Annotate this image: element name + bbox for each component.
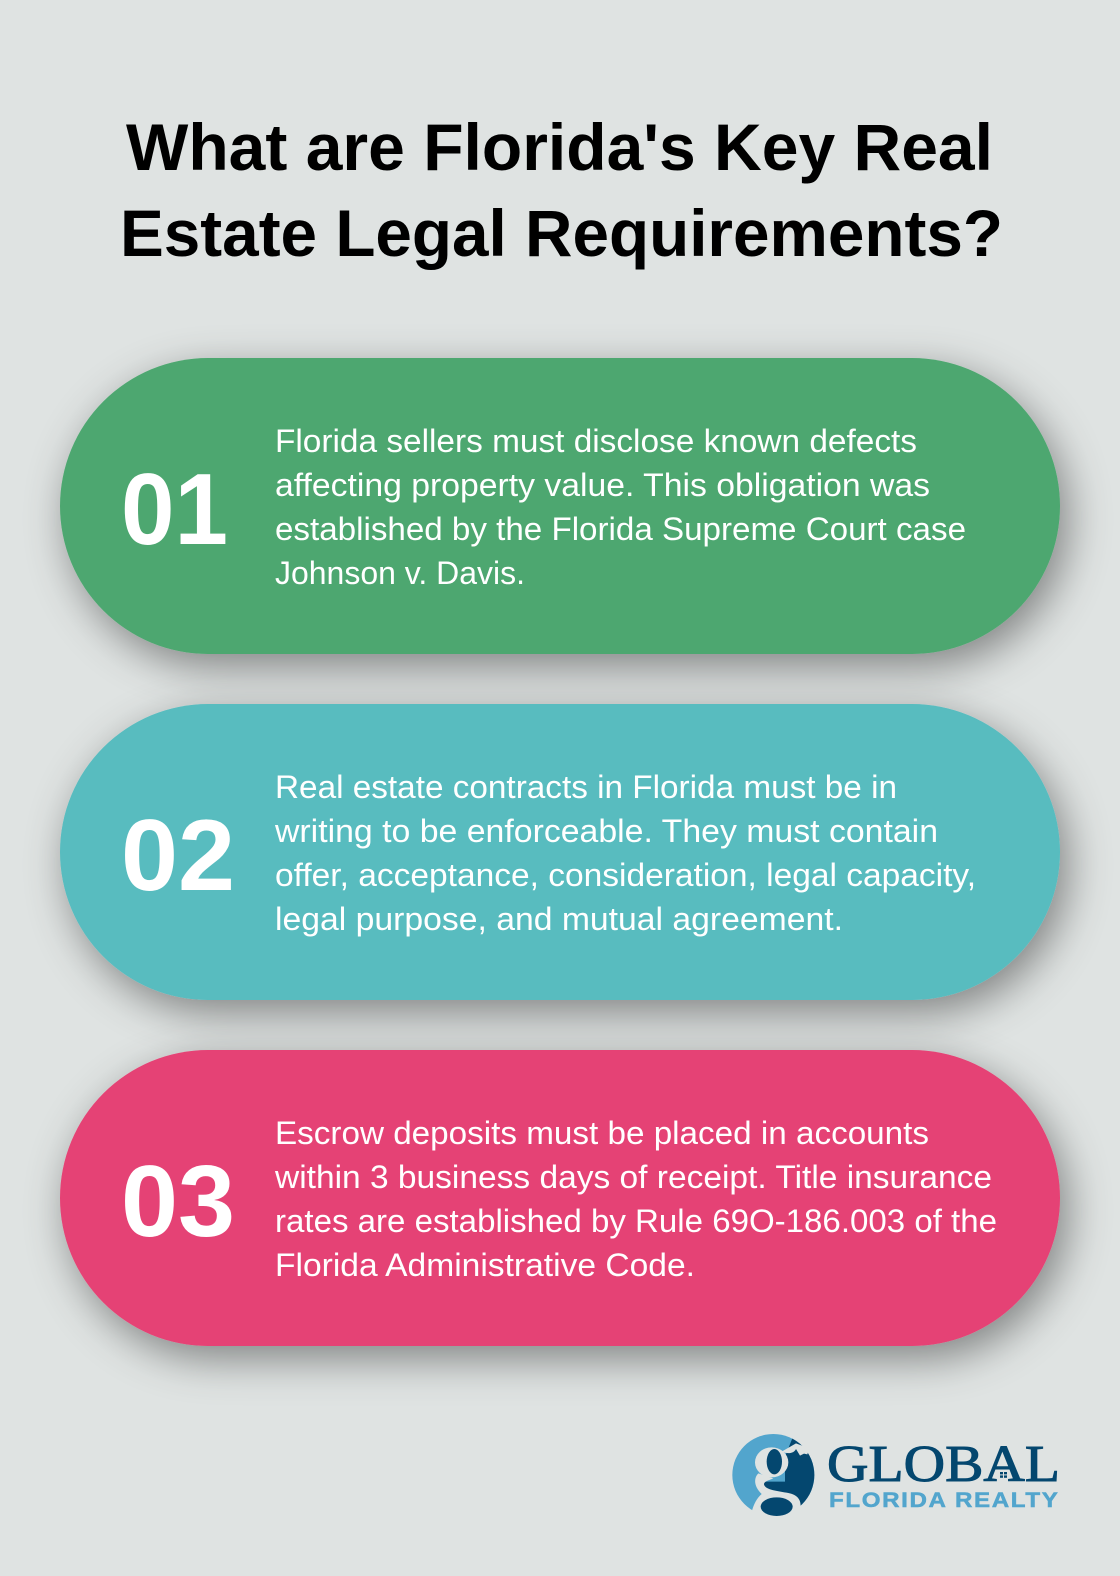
text: contracts: Real estate contracts in Florida must be in — [275, 769, 897, 805]
number 02: 02 — [121, 800, 235, 912]
text: escrow: Florida Administrative Code. — [275, 1247, 695, 1283]
text: contracts: writing to be enforceable. They must contain — [274, 813, 938, 849]
icon: g roundel — [732, 1434, 814, 1516]
teal pill — [60, 704, 1060, 1000]
number 01: 01 — [121, 454, 228, 566]
text: disclosure: Florida sellers must disclose known defects — [275, 423, 917, 459]
wordmark: Florida Realty: FLORIDA REALTY — [829, 1488, 1058, 1512]
text: escrow — [274, 1115, 997, 1283]
title — [120, 110, 1003, 270]
number 03: 03 — [121, 1146, 235, 1258]
icon: house window — [1000, 1472, 1007, 1478]
text: disclosure: Johnson v. Davis. — [275, 555, 525, 591]
logo: Global Florida Realty — [732, 1432, 1060, 1522]
text: contracts — [274, 769, 976, 937]
text: contracts: offer, acceptance, consideration, legal capacity, — [275, 857, 976, 893]
green pill — [60, 358, 1060, 654]
panel: step 02 contracts — [60, 704, 1060, 1000]
title: Estate Legal Requirements? — [120, 196, 1003, 270]
text: contracts: legal purpose, and mutual agreement. — [275, 901, 843, 937]
text: disclosure: affecting property value. This obligation was — [275, 467, 930, 503]
wordmark: GLOBAL: GLOBAL — [827, 1436, 1060, 1493]
panel: step 01 disclosure — [60, 358, 1060, 654]
text: escrow: Escrow deposits must be placed in accounts — [275, 1115, 929, 1151]
text: escrow: within 3 business days of receipt. Title insurance — [274, 1159, 992, 1195]
pink pill — [60, 1050, 1060, 1346]
text: disclosure: established by the Florida Supreme Court case — [275, 511, 966, 547]
panel: step 03 escrow — [60, 1050, 1060, 1346]
text: disclosure — [275, 423, 966, 591]
text: escrow: rates are established by Rule 69O-186.003 of the — [275, 1203, 997, 1239]
title: What are Florida's Key Real — [126, 110, 993, 184]
